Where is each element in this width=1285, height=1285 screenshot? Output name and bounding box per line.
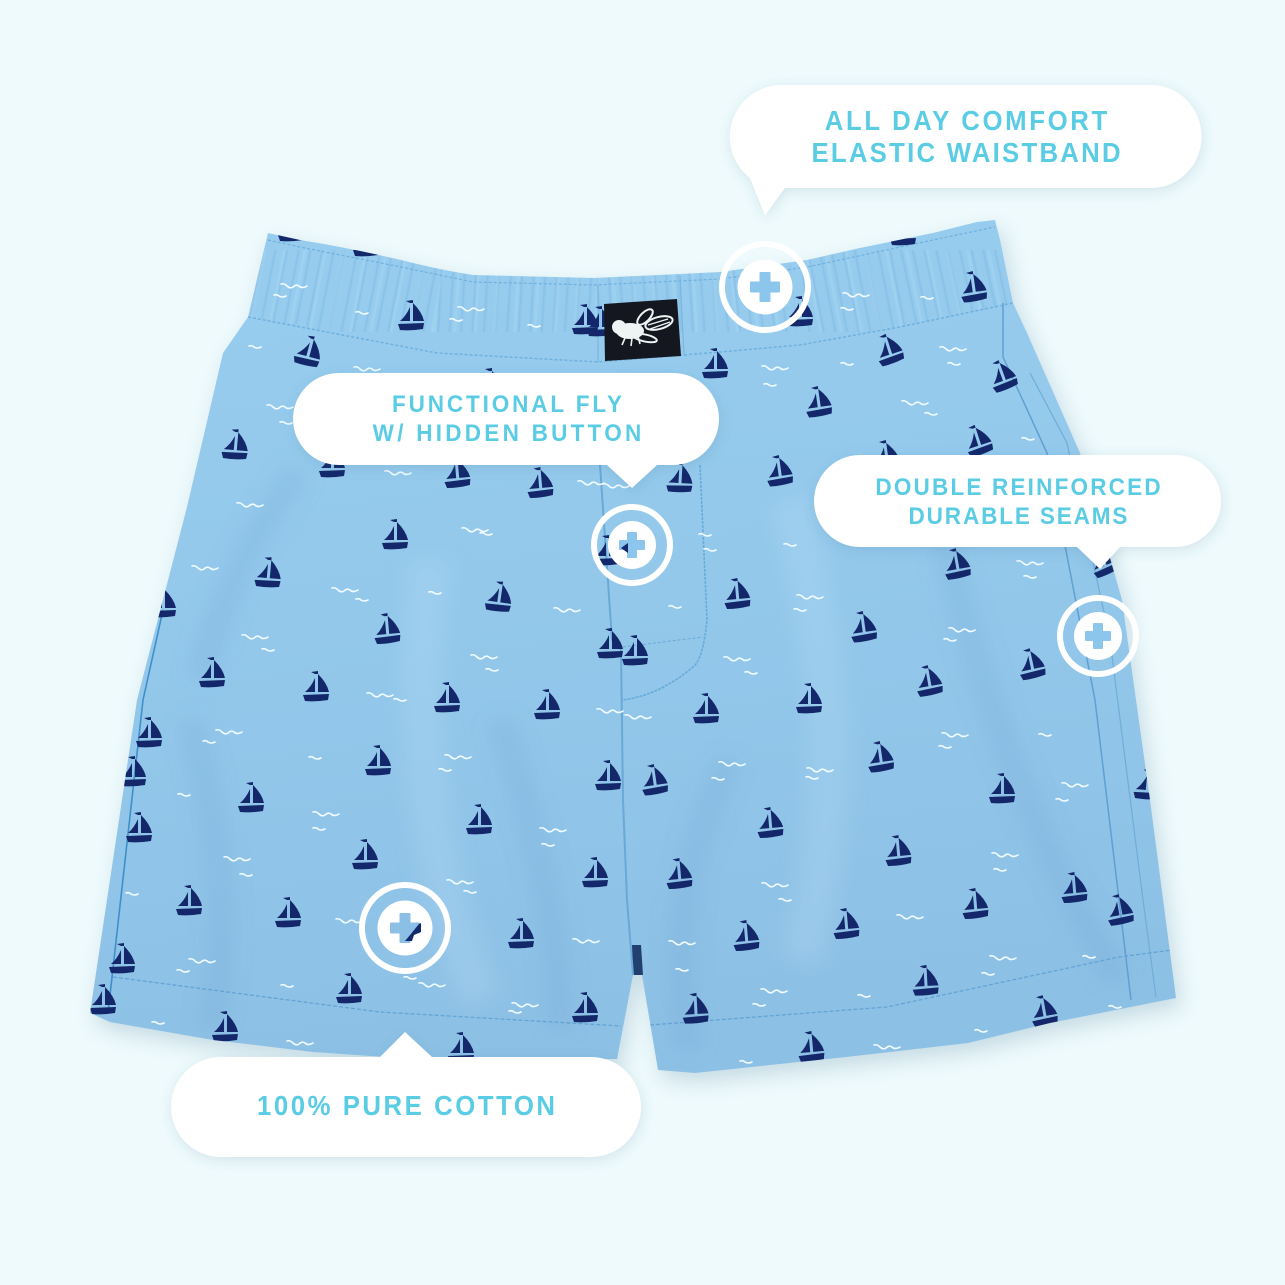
callout: elastic waistband: ELASTIC WAISTBAND xyxy=(811,137,1121,168)
callout: functional fly: W/ HIDDEN BUTTON xyxy=(373,419,641,446)
hotspot: seams xyxy=(1060,598,1136,674)
callout: elastic waistband xyxy=(730,85,1201,215)
brand label with fish logo xyxy=(604,299,681,361)
callout: elastic waistband: ALL DAY COMFORT xyxy=(825,105,1108,136)
callout: functional fly: FUNCTIONAL FLY xyxy=(392,390,622,417)
hotspot: waistband xyxy=(722,244,808,330)
callout: functional fly xyxy=(293,373,719,488)
callout: durable seams: DURABLE SEAMS xyxy=(909,502,1127,529)
shorts illustration xyxy=(90,211,1181,1082)
callout: pure cotton: 100% PURE COTTON xyxy=(257,1090,555,1121)
callout: pure cotton xyxy=(171,1032,641,1157)
sailboat print xyxy=(90,211,1162,1062)
hotspot: cotton xyxy=(362,885,448,971)
hotspot: fly xyxy=(594,507,670,583)
wave print xyxy=(126,284,1121,1063)
callout: durable seams: DOUBLE REINFORCED xyxy=(875,473,1161,500)
callout: durable seams xyxy=(814,455,1221,569)
